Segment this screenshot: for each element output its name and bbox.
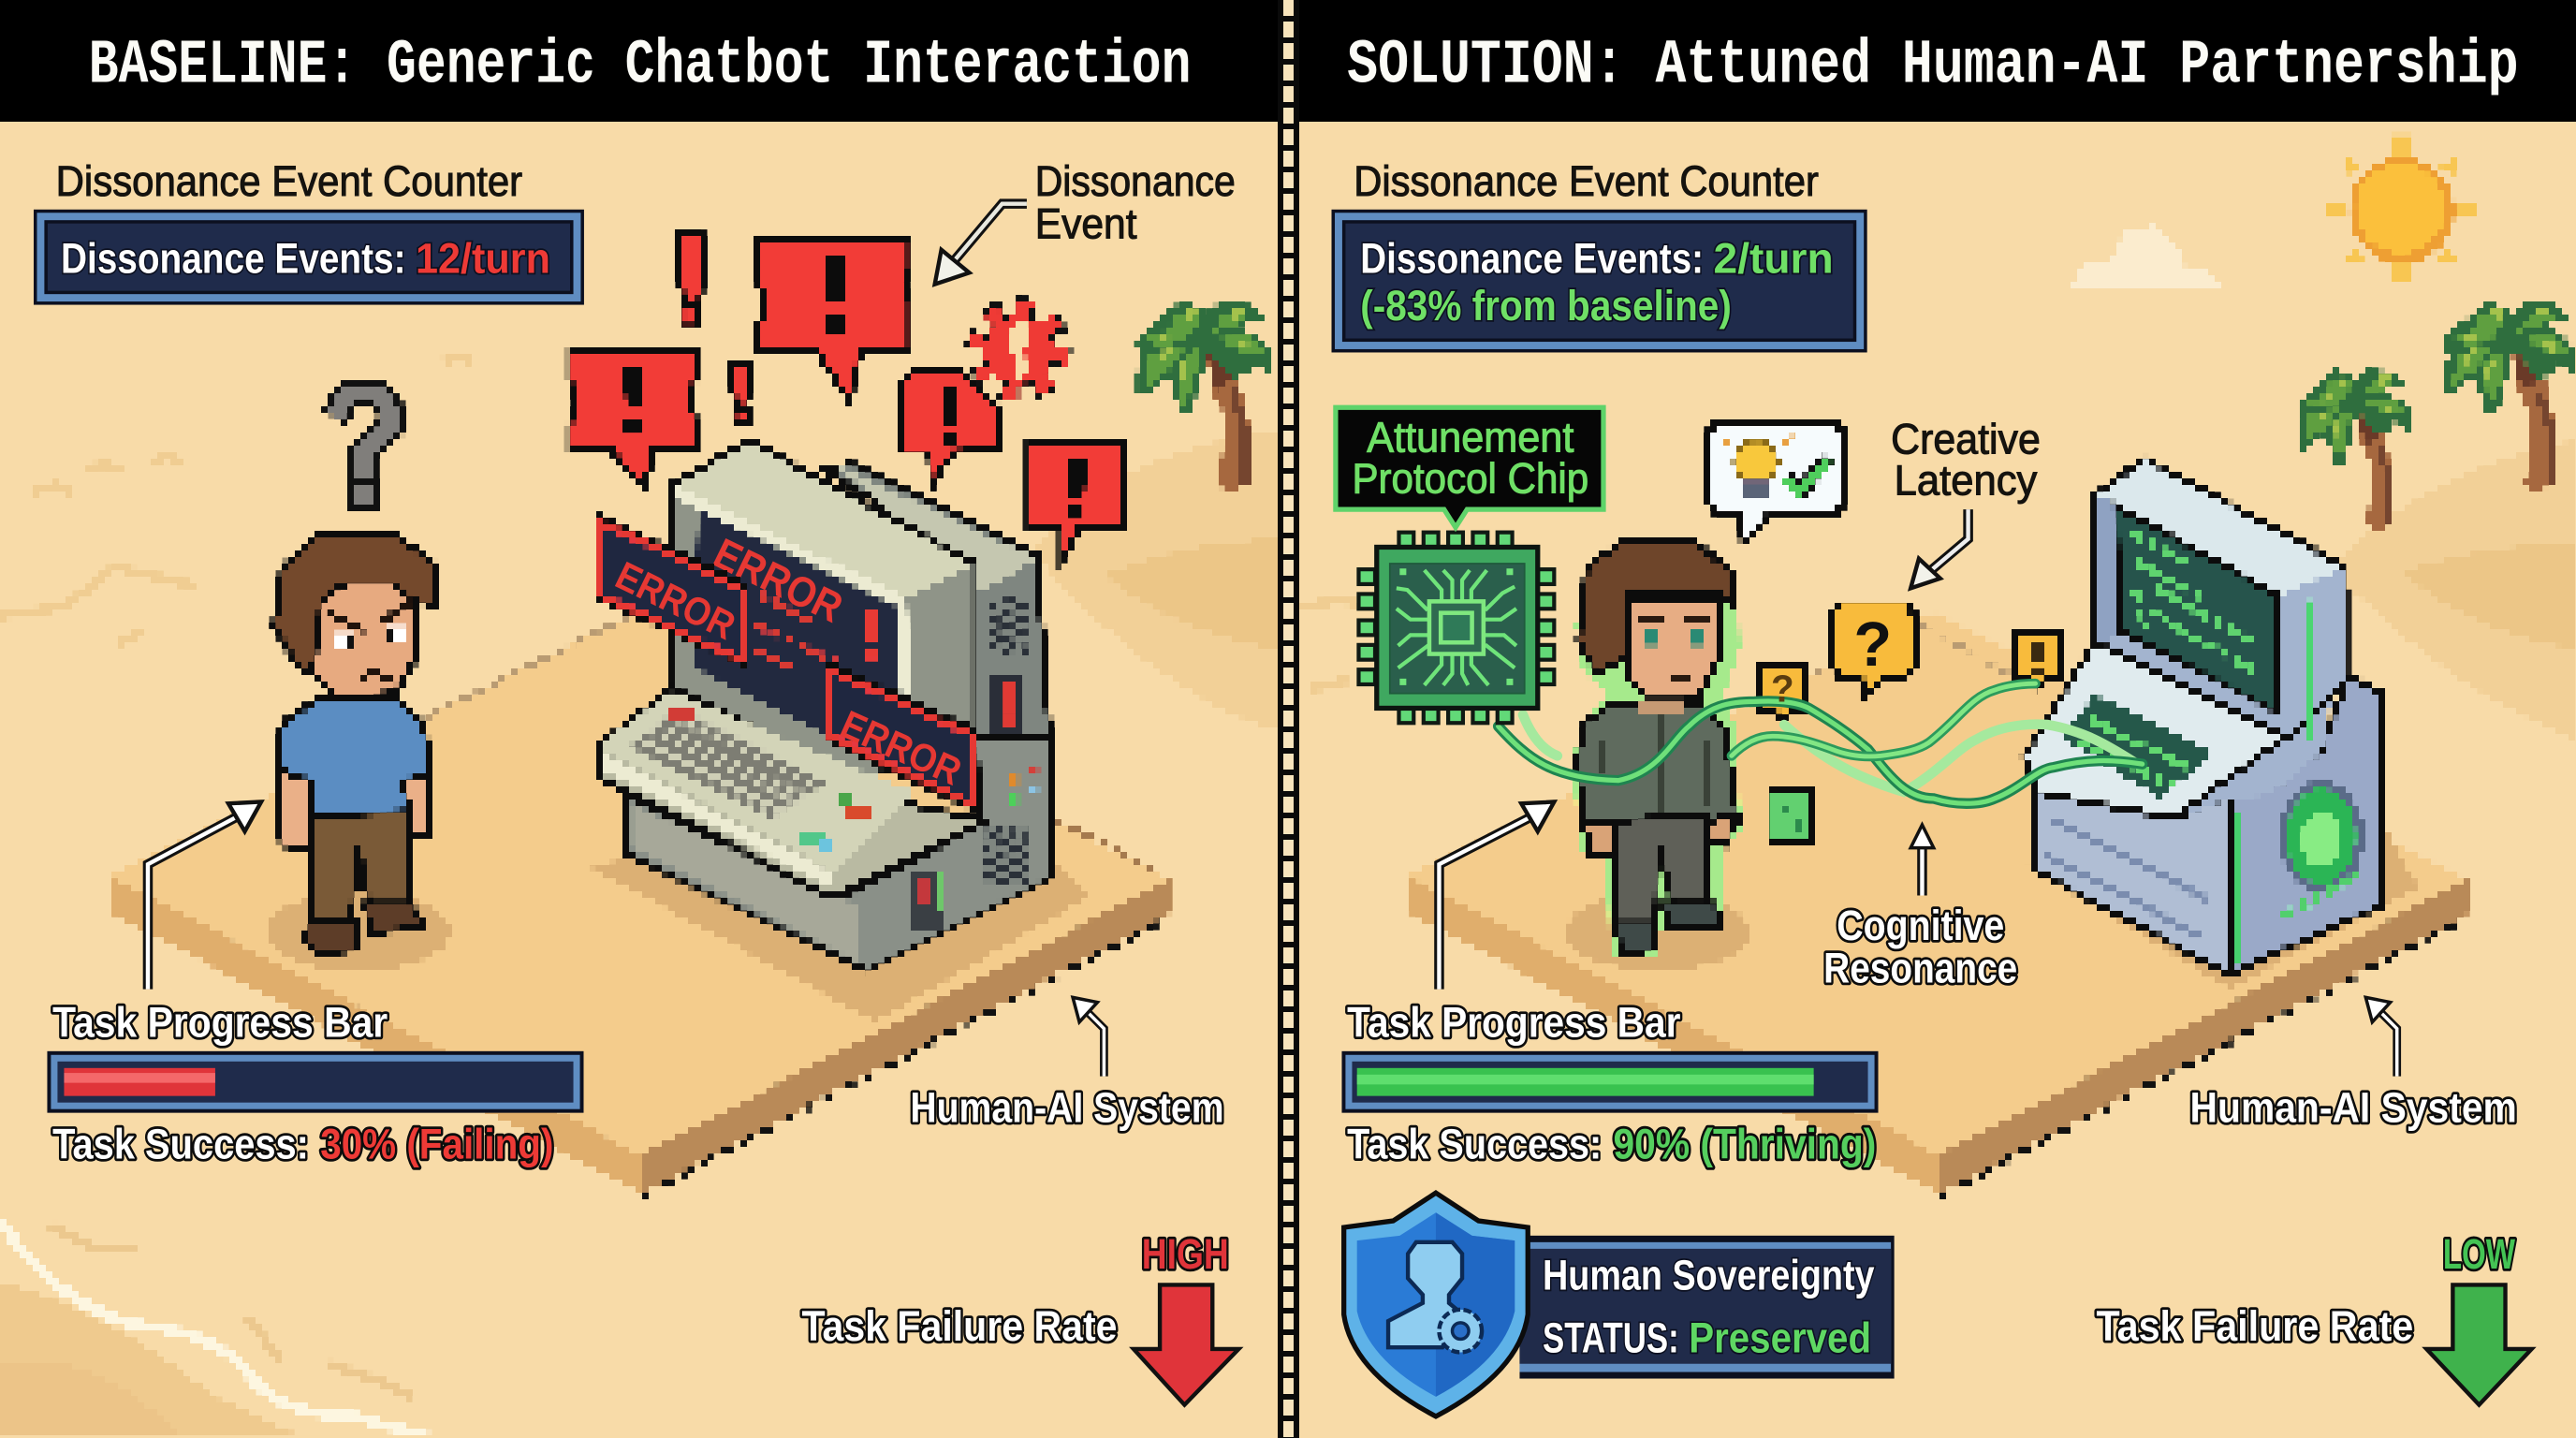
red exclamation small: [731, 361, 751, 424]
computer: monitor body: [672, 440, 976, 788]
solution task success: 90% (Thriving): [1614, 1120, 1876, 1167]
baseline dissonance counter box: [37, 212, 581, 302]
red keys: [670, 708, 696, 721]
grey question mark: [333, 394, 391, 507]
red exclamation tall: [677, 233, 707, 327]
yellow question bubble large: [1832, 603, 1915, 698]
cloud: [2070, 225, 2221, 286]
chip: corner pads: [1399, 568, 1513, 685]
yellow question bubble small: [1758, 664, 1808, 720]
solution dune: [1298, 440, 2576, 740]
baseline task success: [52, 1120, 553, 1167]
on-screen error text: ERROR: [707, 529, 850, 632]
baseline progress label: Task Progress Bar: [52, 998, 388, 1046]
drive bay: [910, 869, 946, 933]
colored control buttons: [798, 795, 871, 851]
yellow exclamation bubble: [2016, 631, 2058, 690]
character: green glow: [1573, 536, 1741, 960]
character: eyes: [337, 626, 406, 651]
chip: traces: [1397, 570, 1516, 685]
pixel art scene layer, front: [266, 135, 2576, 1196]
attuned computer: [2024, 459, 2382, 975]
attuned computer: green stripe: [2232, 812, 2243, 966]
chip: pins: [1358, 533, 1554, 723]
chip: core: [1429, 601, 1484, 654]
computer: keyboard deck: [598, 688, 986, 897]
attuned human character: [1566, 536, 1749, 971]
solution failure rate label: Task Failure Rate: [2097, 1302, 2413, 1350]
attunement chip callout: Attunement: [1367, 414, 1574, 462]
shadow under attuned machine: [2024, 822, 2419, 990]
attuned computer: side light: [2306, 600, 2315, 740]
baseline task success: Task Success:: [52, 1120, 309, 1167]
lightbulb: [1720, 424, 1794, 500]
green check: [1786, 459, 1828, 492]
solution progress label: Task Progress Bar: [1347, 998, 1681, 1046]
attuned computer: backing between tower and column: [2070, 642, 2333, 818]
attuned computer: screen: [2116, 506, 2277, 712]
error sign right: [827, 664, 976, 810]
machine shadow: [585, 822, 1090, 1022]
shield person icon: [1388, 1242, 1462, 1347]
attuned computer: keyboard panel: [2060, 695, 2215, 799]
baseline computer: [626, 440, 1053, 971]
progress fill 30 percent: [64, 1068, 215, 1096]
counter label: Dissonance Events:: [1360, 234, 1704, 282]
baseline palm tree: [1137, 301, 1271, 493]
lower vents: [983, 825, 1030, 882]
panel background: solution sand: [1297, 122, 2576, 1438]
on-screen exclamation: [864, 609, 875, 659]
solution task success: [1347, 1120, 1876, 1167]
center divider: [1278, 0, 1299, 1438]
dissonance event label: Event: [1035, 199, 1137, 247]
sovereignty value: Preserved: [1689, 1313, 1871, 1361]
pixel art scene layer, back: [0, 301, 1278, 1438]
computer: screen: [695, 509, 896, 772]
cognitive resonance wires: [1499, 683, 2143, 803]
creative latency label: [1891, 415, 2041, 504]
dissonance event label: [1035, 157, 1236, 247]
attunement chip callout: [1336, 407, 1603, 527]
character: head: [305, 575, 417, 697]
baseline down arrow red: [1134, 1284, 1238, 1405]
confused human character: [266, 534, 450, 971]
character: trousers: [309, 805, 411, 923]
character: hands: [1584, 814, 1734, 855]
character: head: [1623, 598, 1719, 698]
on-screen glitch lines: [753, 594, 838, 670]
cognitive resonance label: [1823, 902, 2017, 992]
attuned computer: base front: [2036, 792, 2230, 975]
character: trousers: [1614, 805, 1708, 929]
red status slot: [992, 674, 1023, 735]
question mark on large bubble: ?: [1853, 610, 1892, 680]
character: boots: [1614, 903, 1721, 953]
sovereignty title: Human Sovereignty: [1543, 1252, 1875, 1299]
character: arms: [276, 769, 431, 851]
attunement protocol chip icon: [1358, 533, 1554, 723]
question mark on small bubble: ?: [1771, 667, 1794, 710]
red alert bubble right: [1029, 444, 1125, 560]
solution arrow to progress bar: [1439, 801, 1554, 990]
character: angry brows: [326, 601, 414, 631]
progress fill 90 percent: [1357, 1068, 1814, 1096]
creative latency label: Latency: [1895, 456, 2037, 504]
attuned computer: right column: [2230, 677, 2382, 975]
creative latency label: Creative: [1891, 415, 2041, 462]
large palm tree: [2443, 301, 2576, 493]
character: shirt: [276, 698, 431, 815]
panel background: baseline sand: [0, 122, 1279, 1438]
solution dissonance counter box: [1334, 212, 1865, 350]
solution isometric platform: [1408, 613, 2467, 1196]
baseline computer front parts: [598, 598, 1038, 933]
computer: slab and side: [825, 463, 1050, 738]
character: shoes: [305, 903, 424, 953]
shield gear icon: [1439, 1310, 1482, 1352]
side vents: [992, 598, 1030, 655]
character: collar: [1636, 698, 1686, 712]
character: eyes and mouth: [1645, 629, 1705, 646]
error sign left: [598, 516, 746, 664]
solution system arrow: [2365, 997, 2397, 1077]
shoreline wave and foam: [0, 1219, 431, 1438]
baseline task success: 30% (Failing): [320, 1120, 553, 1167]
baseline high label: HIGH: [1142, 1230, 1229, 1278]
cognitive resonance arrow: [1910, 825, 1934, 896]
baseline counter heading: Dissonance Event Counter: [56, 157, 522, 205]
attunement chip callout: Protocol Chip: [1352, 455, 1588, 503]
character: jacket: [1577, 703, 1738, 838]
computer: top face: [675, 444, 973, 598]
cognitive resonance label: Cognitive: [1837, 902, 2004, 949]
green data block: [1769, 792, 1812, 842]
character: frown: [363, 670, 391, 681]
sun: [2324, 135, 2479, 285]
baseline dune: [0, 357, 1278, 731]
chip: body: [1377, 547, 1538, 708]
red alert bubble left: [570, 352, 695, 488]
sovereignty status: STATUS:: [1543, 1313, 1679, 1361]
solution system label: Human-AI System: [2190, 1084, 2517, 1132]
counter value: 2/turn: [1714, 234, 1834, 282]
attuned computer: green orb: [2278, 781, 2364, 892]
baseline failure rate label: Task Failure Rate: [801, 1302, 1117, 1350]
LED indicators: [1007, 764, 1038, 807]
solution low label: LOW: [2443, 1230, 2516, 1278]
solution task success: Task Success:: [1347, 1120, 1602, 1167]
header bar: [0, 0, 2576, 122]
solution counter heading: Dissonance Event Counter: [1354, 157, 1819, 205]
baseline progress bar: [50, 1053, 581, 1110]
character: jacket zip and accents: [1602, 710, 1708, 814]
character: hair: [1579, 539, 1734, 674]
counter label: Dissonance Events:: [61, 234, 406, 282]
creative latency arrow: [1910, 509, 1969, 588]
counter delta: (-83% from baseline): [1360, 282, 1732, 330]
attuned computer: deck: [2024, 642, 2287, 818]
character: hair: [274, 534, 439, 674]
baseline header title: BASELINE: Generic Chatbot Interaction: [89, 31, 1191, 102]
sign error text left: ERROR: [609, 553, 742, 648]
attuned computer: code lines: [2132, 534, 2254, 670]
attuned computer: lower vent: [2284, 874, 2359, 917]
human sovereignty shield: [1344, 1193, 1528, 1416]
red alert bubble large: [759, 240, 910, 401]
sign error text right: ERROR: [834, 702, 968, 794]
arrow to dissonance event: [935, 204, 1027, 285]
counter value: 12/turn: [416, 234, 550, 282]
baseline isometric platform: [110, 613, 1170, 1196]
red alert bubble middle: [899, 368, 1003, 487]
solution down arrow green: [2426, 1284, 2532, 1405]
keyboard keys: [629, 707, 827, 820]
small palm tree: [2298, 370, 2411, 531]
baseline arrow to progress bar: [148, 801, 261, 990]
baseline system label: Human-AI System: [910, 1084, 1224, 1132]
dissonance event label: Dissonance: [1035, 157, 1236, 205]
red warning gear: [977, 309, 1060, 391]
cognitive resonance label: Resonance: [1823, 945, 2017, 992]
solution progress bar: [1344, 1053, 1876, 1110]
bulb speech bubble: [1707, 420, 1845, 544]
computer: base: [626, 738, 1053, 971]
human sovereignty panel: [1519, 1236, 1895, 1379]
baseline system arrow: [1073, 997, 1104, 1077]
attuned computer: monitor tower: [2095, 459, 2346, 740]
